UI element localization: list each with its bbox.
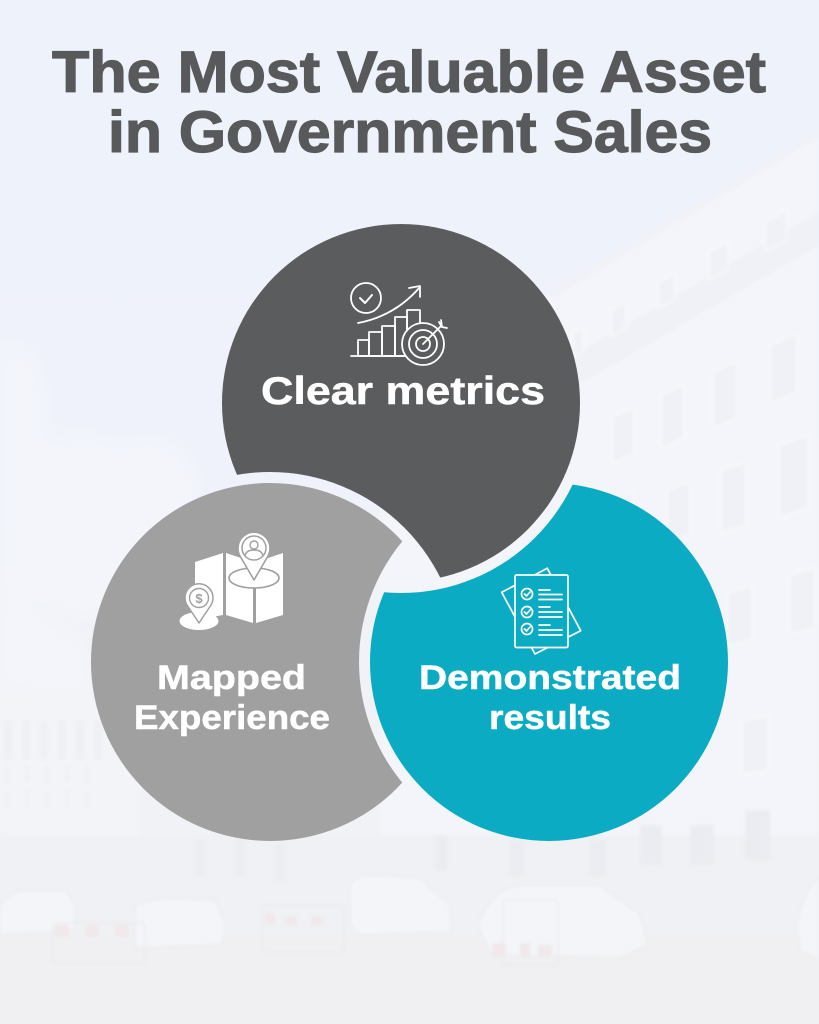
icon: map with location pins: $ <box>195 591 203 606</box>
icon: checklist documents <box>502 568 581 654</box>
left building <box>0 685 140 850</box>
label: mapped experience: Mapped <box>157 659 306 697</box>
icon: chart with target and check <box>351 283 447 365</box>
label: mapped experience <box>134 659 330 737</box>
label: demonstrated results: results <box>489 699 611 737</box>
panel: clear metrics <box>222 224 580 582</box>
panel: demonstrated results <box>370 483 728 841</box>
circle: gray segment <box>91 483 402 841</box>
title: The Most Valuable Asset <box>52 40 766 105</box>
circle: dark segment <box>222 224 580 582</box>
right building facade <box>380 130 819 880</box>
panel: mapped experience <box>91 483 402 841</box>
label: mapped experience: Experience <box>134 699 330 737</box>
label: clear metrics: Clear metrics <box>261 370 545 413</box>
clouds <box>0 344 200 700</box>
title <box>52 40 766 165</box>
ground floor and street <box>0 835 819 915</box>
road barriers <box>53 900 558 965</box>
title: in Government Sales <box>108 100 712 165</box>
label: demonstrated results: Demonstrated <box>419 659 681 697</box>
label: demonstrated results <box>419 659 681 737</box>
icon: map with location pins <box>180 532 283 630</box>
parked cars <box>0 875 819 960</box>
circle: teal segment <box>370 483 728 841</box>
